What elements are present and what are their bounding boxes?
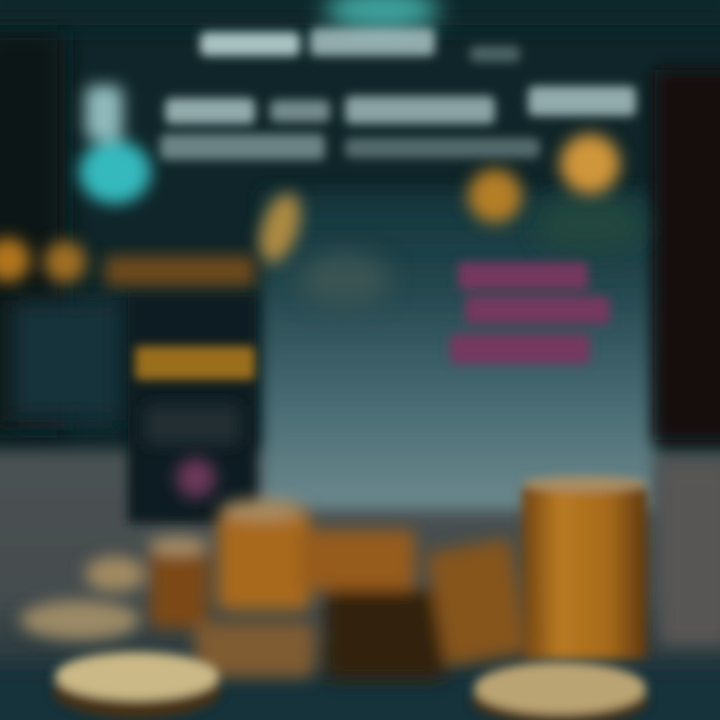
coin stack: centre xyxy=(85,499,530,680)
floor right of panel xyxy=(660,465,720,645)
icon: orange glowing lights xyxy=(0,134,620,283)
dark green right glow xyxy=(535,197,645,253)
coin stack: tall right xyxy=(522,476,647,659)
text block: muted lines xyxy=(145,405,240,445)
text block: orange value xyxy=(135,346,255,380)
teal glow at top xyxy=(324,0,440,32)
chart sketch: faint centre marks xyxy=(300,254,390,306)
icon: cyan flask xyxy=(79,85,151,204)
icon: pink mark xyxy=(176,458,216,498)
coin: large front right xyxy=(472,662,648,720)
coin: large front left xyxy=(53,652,221,718)
dark right door panel xyxy=(655,70,720,440)
panel: dark centre-left column xyxy=(105,256,256,523)
coins: stacks and piles xyxy=(20,476,648,720)
text block: pink callout xyxy=(450,262,610,364)
coin: flat left xyxy=(20,600,140,640)
heading: blurred title lines xyxy=(160,28,636,160)
text block: orange subheading xyxy=(105,256,255,286)
